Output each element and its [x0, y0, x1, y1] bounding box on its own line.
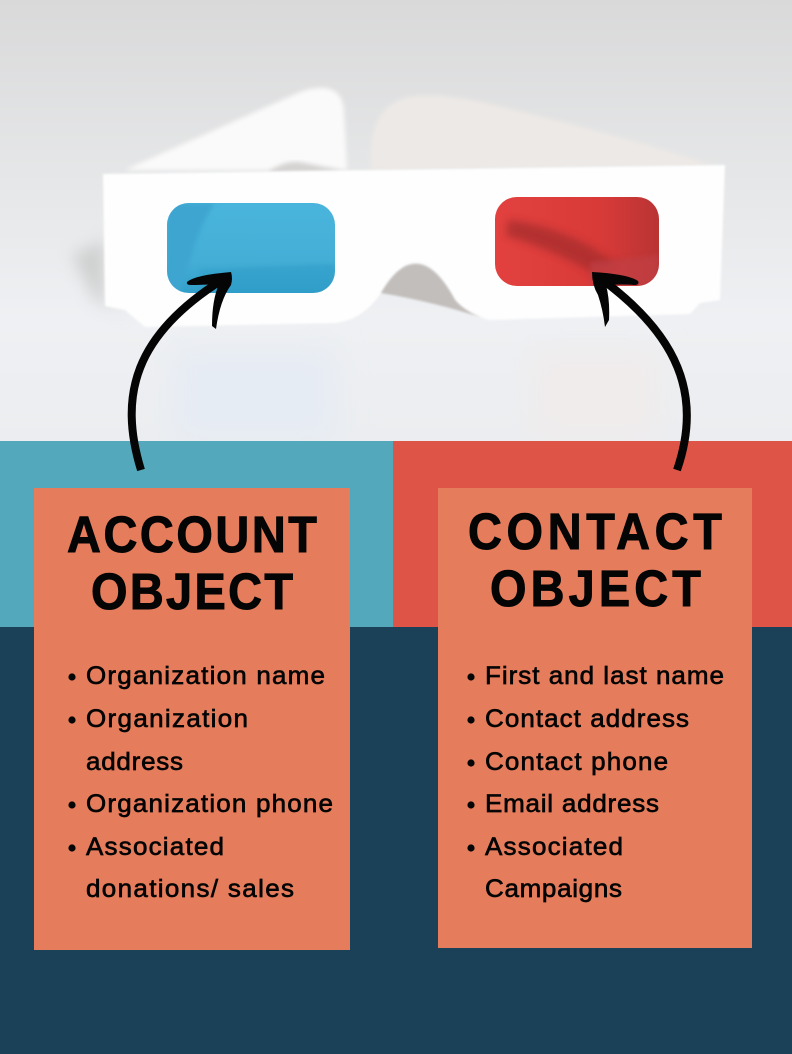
- heading: contact object: CONTACT: [468, 504, 722, 560]
- bullet list: contact fields: Campaigns: [485, 875, 622, 903]
- heading: account object: OBJECT: [91, 564, 293, 620]
- colour band: navy: [0, 627, 792, 1054]
- bullet list: contact fields: [467, 662, 724, 903]
- bullet list: account fields: donations/ sales: [86, 875, 294, 903]
- bullet list: account fields: Organization: [86, 705, 248, 733]
- panel: contact object: [438, 488, 752, 948]
- colour band: red: [393, 441, 792, 627]
- bullet list: contact fields: First and last name: [485, 662, 724, 690]
- bullet list: account fields: [68, 662, 333, 903]
- heading: contact object: [468, 504, 722, 617]
- colour band: teal: [0, 441, 393, 627]
- frame: [103, 165, 725, 327]
- glasses cast shadow: [72, 240, 130, 318]
- photo: 3D glasses: [72, 88, 725, 327]
- panel: account object: [34, 488, 350, 950]
- bullet list: account fields: Organization phone: [86, 790, 333, 818]
- bullet list: contact fields: Contact address: [485, 705, 689, 733]
- blue lens: [167, 203, 335, 293]
- left temple arm: [125, 88, 347, 170]
- right temple arm: [370, 96, 716, 170]
- photo background: [0, 0, 792, 442]
- red lens: [495, 197, 659, 286]
- heading: contact object: OBJECT: [490, 561, 701, 617]
- bullet list: contact fields: Associated: [485, 833, 623, 861]
- bullet list: contact fields: Email address: [485, 790, 659, 818]
- bullet list: account fields: address: [86, 748, 183, 776]
- arrow: account object to blue lens: [132, 272, 232, 470]
- arrow: contact object to red lens: [592, 272, 687, 470]
- bullet list: contact fields: Contact phone: [485, 748, 668, 776]
- bullet list: account fields: Organization name: [86, 662, 325, 690]
- heading: account object: ACCOUNT: [67, 507, 317, 563]
- bullet list: account fields: Associated: [86, 833, 224, 861]
- temple shadow: [268, 162, 345, 172]
- nose cut-out shadow: [381, 264, 486, 319]
- heading: account object: [67, 507, 317, 620]
